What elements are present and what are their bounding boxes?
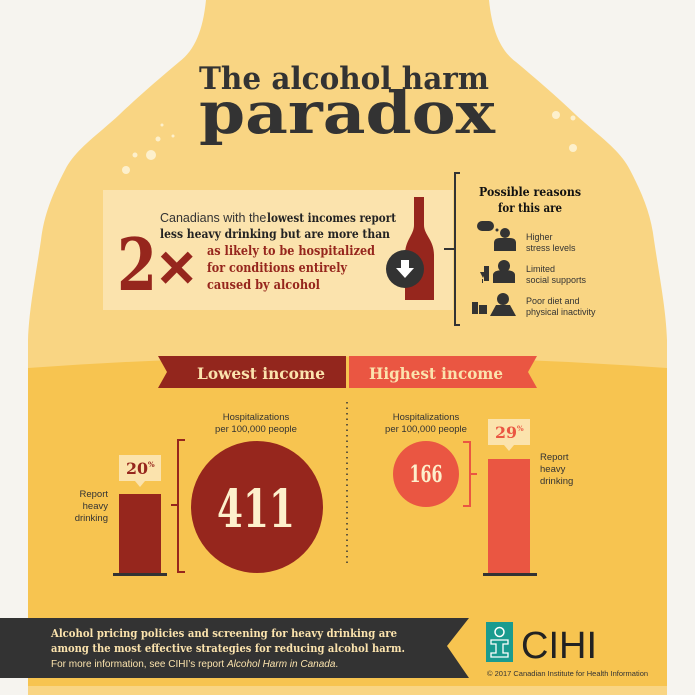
ribbon: highest income — [349, 356, 537, 388]
panel: possible reasons: for this are — [498, 201, 562, 215]
text block: intro — [160, 211, 396, 241]
chart: highest income: heavy — [540, 464, 566, 475]
chart: lowest income: heavy — [83, 501, 108, 512]
text block: hospitalized: for conditions entirely — [207, 261, 347, 276]
text block: intro: Canadians with the — [160, 211, 266, 225]
panel: possible reasons — [472, 185, 596, 317]
text block: hospitalized — [207, 244, 375, 293]
callout 29% — [488, 419, 530, 451]
panel: possible reasons: Poor diet and — [526, 296, 580, 306]
text block: intro: lowest incomes report — [267, 211, 396, 225]
chart: lowest income — [75, 412, 323, 576]
logo: CIHI — [486, 622, 648, 678]
banner: conclusion: For more information, see CIHI’s report Alcohol Harm in Canada. — [51, 659, 338, 670]
chart: lowest income: drinking — [75, 513, 108, 524]
callout 20% — [119, 455, 161, 487]
divider dots — [346, 402, 348, 565]
banner: conclusion: among the most effective strategies for reducing alcohol harm. — [51, 641, 405, 655]
chart: highest income: 166 — [410, 461, 442, 488]
big 2x: 2 — [117, 222, 157, 307]
text block: hospitalized: as likely to be hospitalized — [207, 244, 375, 259]
panel: possible reasons: Limited — [526, 264, 555, 274]
panel: key finding: × — [158, 231, 195, 303]
icon: wine bottle with down arrow — [386, 197, 434, 300]
callout 29%: 29 — [495, 423, 517, 442]
panel: possible reasons: Possible reasons — [479, 185, 581, 199]
panel: possible reasons: stress levels — [526, 243, 576, 253]
callout 20%: 20 — [126, 459, 148, 478]
logo: CIHI: © 2017 Canadian Institute for Health Information — [487, 669, 648, 678]
panel: possible reasons: physical inactivity — [526, 307, 596, 317]
callout 20%: % — [148, 460, 155, 469]
bracket — [444, 173, 460, 325]
chart: highest income: Report — [540, 452, 569, 463]
chart: lowest income: per 100,000 people — [215, 424, 297, 435]
chart: lowest income: Report — [79, 489, 108, 500]
icon: stress — [477, 221, 516, 251]
logo: CIHI: CIHI — [521, 625, 597, 667]
panel: possible reasons: Higher — [526, 232, 553, 242]
ribbon: highest income: Highest income — [369, 364, 503, 383]
text block: intro: less heavy drinking but are more than — [160, 227, 390, 241]
title: The alcohol harm — [199, 61, 489, 97]
panel: possible reasons: social supports — [526, 275, 587, 285]
chart: highest income: drinking — [540, 476, 573, 487]
ribbon: lowest income — [158, 356, 346, 388]
title — [199, 61, 495, 147]
ribbon: lowest income: Lowest income — [197, 364, 325, 383]
panel: key finding — [103, 190, 453, 310]
banner: conclusion — [0, 618, 469, 678]
icon: diet — [472, 293, 516, 316]
banner: conclusion: Alcohol pricing policies and screening for heavy drinking are — [50, 626, 397, 640]
icon: social — [480, 260, 515, 283]
text block: hospitalized: caused by alcohol — [207, 278, 320, 293]
chart: lowest income: Hospitalizations — [223, 412, 290, 423]
chart: highest income: per 100,000 people — [385, 424, 467, 435]
chart: highest income: Hospitalizations — [393, 412, 460, 423]
chart: lowest income: 411 — [217, 479, 295, 540]
callout 29%: % — [517, 424, 524, 433]
title: paradox — [199, 79, 495, 147]
chart: highest income — [385, 412, 573, 576]
